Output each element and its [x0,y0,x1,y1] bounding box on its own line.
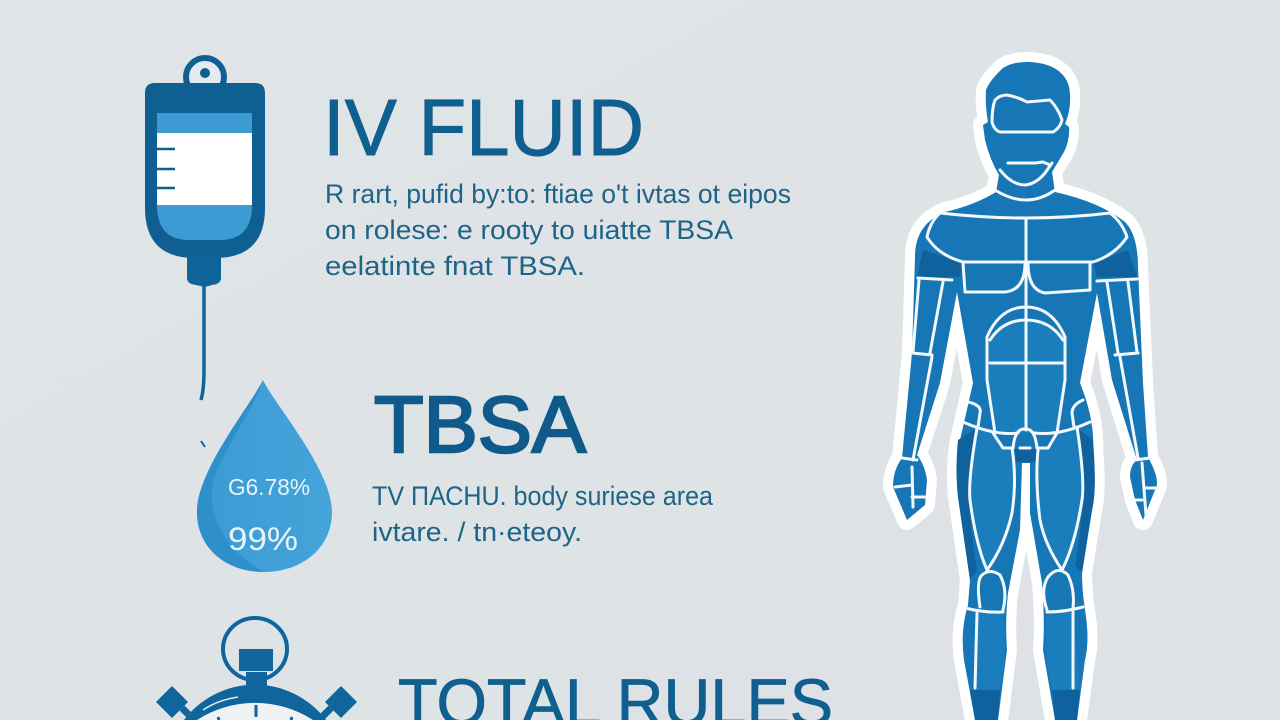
text block: IV fluid description: eelatinte fnat TBSA. [325,251,585,281]
heading: IV FLUID: IV FLUID [323,83,644,172]
text block: TBSA description: ivtare. / tn·eteoy. [372,517,582,547]
white segment lines [895,95,1160,688]
figure: human body map [893,62,1160,720]
icon: water drop with percentages: G6.78% [228,474,310,500]
icon: stopwatch [156,618,357,720]
text block: IV fluid description [325,179,791,281]
text block: TBSA description: TV ПАСHU. body suriese area [372,481,714,511]
text block: TBSA description [372,481,714,547]
body silhouette [893,62,1157,720]
icon: water drop with percentages [197,380,332,572]
icon: water drop with percentages: 99% [228,521,298,557]
heading: TBSA: TBSA [374,380,587,469]
dark shading [917,250,1137,720]
icon: IV bag [145,58,265,447]
text block: IV fluid description: on rolese: e rooty to uiatte TBSA [325,215,733,245]
text block: IV fluid description: R rart, pufid by:to: ftiae o't ivtas ot eipos [325,179,791,209]
muscle panels [970,320,1083,690]
